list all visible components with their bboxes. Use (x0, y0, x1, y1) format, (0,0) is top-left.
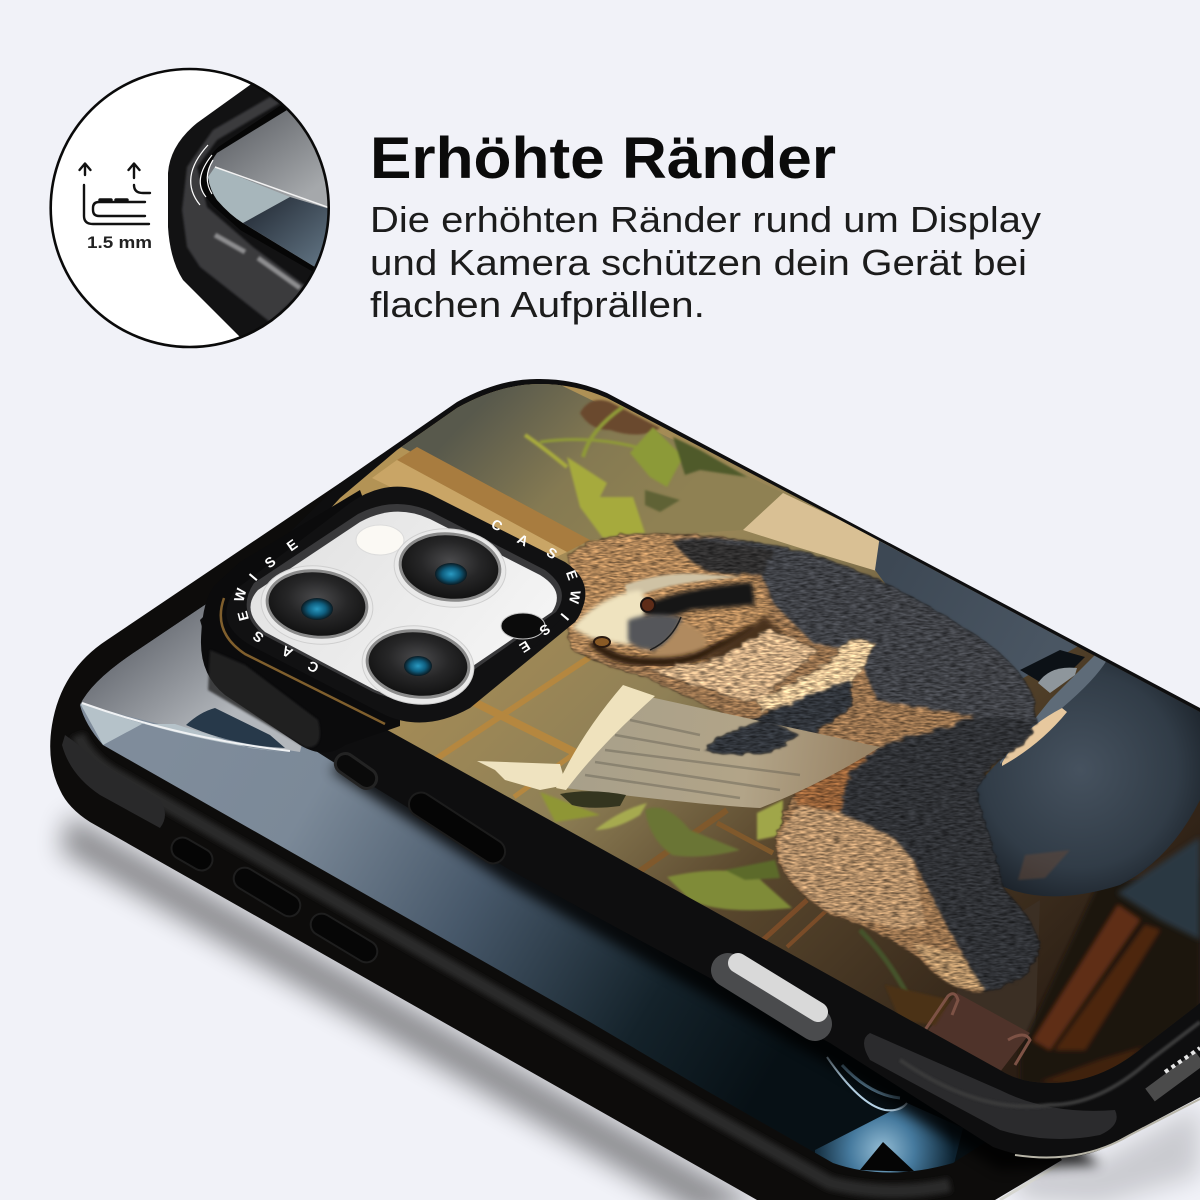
back frame carbon pad (62, 735, 165, 828)
casewise lettering left: S (261, 553, 279, 571)
flower pot (927, 993, 1030, 1072)
sloth lower hand (560, 791, 626, 808)
book spine edge (556, 685, 655, 790)
screen lower blue glow (815, 1103, 963, 1175)
corner inner rim (204, 106, 318, 270)
back frame highlight (78, 735, 950, 1191)
sloth chest and arm (647, 628, 877, 757)
tissue (1038, 668, 1077, 693)
power button (167, 833, 217, 875)
casewise lettering left: I (246, 570, 260, 584)
sloth hand on book (702, 720, 800, 755)
plant soil (885, 985, 950, 1025)
lidar sensor (501, 613, 545, 639)
lens top right (390, 523, 510, 613)
book page (565, 697, 880, 808)
right frame grille (1150, 1058, 1200, 1095)
wall light patch (743, 493, 900, 572)
sloth muzzle (628, 614, 682, 650)
sloth lower eye (594, 637, 610, 647)
back phone (50, 483, 1062, 1200)
camera glass plate (250, 512, 557, 696)
corner frame gloss (215, 235, 300, 288)
label: 1.5 mm: 1.5 mm (87, 233, 152, 252)
toilet base (1117, 837, 1200, 940)
gold sliver around ring (221, 598, 385, 724)
front phone frame (200, 379, 1200, 1158)
window beam (397, 447, 590, 552)
casewise lettering right: E (517, 638, 533, 656)
upper plant (525, 407, 747, 538)
corner screen (208, 100, 340, 280)
casewise lettering right: S (544, 544, 560, 562)
casewise lettering right: A (515, 531, 531, 549)
lens bottom (358, 620, 478, 710)
charging port (728, 963, 818, 1024)
casewise lettering left: C (305, 658, 321, 676)
volume down button (307, 910, 381, 966)
lens left (257, 560, 377, 650)
book left pages (477, 761, 566, 790)
back phone shadow (60, 815, 760, 1200)
wooden floor (1020, 880, 1200, 1085)
window beam light (372, 460, 567, 562)
screen blue curves (827, 1057, 907, 1110)
screen white curve (82, 703, 290, 751)
detail circle: raised edge (51, 69, 340, 360)
toilet reflections (1018, 850, 1070, 880)
sloth brow (624, 572, 740, 595)
body text: und Kamera schützen dein Gerät bei (370, 242, 1027, 283)
front phone shadow on back phone (330, 730, 1100, 1170)
bump carbon pad (208, 650, 320, 747)
casewise lettering right (489, 516, 584, 656)
circle border (51, 69, 329, 347)
toilet tank (875, 535, 1080, 680)
grille teeth (1165, 1048, 1200, 1072)
corner frame grey band (182, 97, 307, 322)
volume up button (230, 864, 304, 920)
microphone slot (331, 750, 381, 792)
ring inner bevel (247, 504, 562, 699)
sloth neck shadow (700, 615, 795, 672)
long side button (404, 788, 510, 868)
front phone shadow on ground (1010, 1105, 1200, 1200)
screen blue curve two (842, 1065, 900, 1098)
artwork upper wall (397, 375, 900, 550)
screen black triangle (860, 1142, 915, 1172)
screen light band (80, 703, 290, 753)
corner screen blue panel (243, 197, 340, 280)
pot rim (925, 994, 1030, 1065)
back phone screen (80, 604, 965, 1172)
screen upper wallpaper (81, 604, 302, 752)
casewise lettering left: W (231, 586, 250, 603)
camera bump (201, 487, 585, 752)
sloth (567, 533, 1040, 993)
sloth cream face (572, 590, 650, 645)
casewise lettering left (231, 536, 321, 676)
casewise lettering right: W (566, 589, 584, 606)
casewise lettering right: S (537, 621, 553, 639)
ring top face over glass edge (530, 598, 583, 650)
front phone (200, 370, 1200, 1158)
toilet gap (1020, 650, 1085, 682)
camera ring (226, 487, 585, 723)
lower frame pad (864, 1033, 1117, 1139)
back phone silver edge (1000, 1164, 1060, 1200)
frame highlight (900, 1022, 1200, 1107)
lattice lower (637, 810, 827, 947)
bump body (201, 490, 400, 752)
front frame edge (1015, 1099, 1200, 1158)
circle fill (51, 69, 329, 347)
impact arcs (191, 145, 213, 205)
casewise lettering left: E (284, 536, 300, 554)
corner frame (168, 80, 340, 360)
body text: flachen Aufprällen. (370, 284, 705, 325)
sloth smile (650, 617, 681, 650)
flash (356, 525, 404, 555)
corner screen white line (215, 167, 330, 208)
corner screen light panel (208, 167, 290, 223)
sloth eye (641, 598, 655, 612)
casewise lettering left: A (279, 643, 295, 661)
toilet rim (1000, 655, 1107, 764)
lower plants (540, 792, 908, 990)
body text (370, 199, 1041, 325)
sloth fur mass (567, 533, 1040, 993)
casewise lettering right: I (558, 610, 572, 624)
casewise lettering left: S (250, 628, 266, 646)
screen dark blob (186, 708, 285, 748)
sloth eye stripe (645, 582, 755, 618)
book (477, 685, 880, 808)
back phone frame (50, 483, 1062, 1200)
wall behind legs (957, 900, 1040, 1040)
casewise lettering right: E (563, 568, 581, 582)
icon: raised edge diagram (80, 164, 150, 224)
upper plant pot (580, 400, 660, 435)
phone corner detail (168, 80, 340, 360)
toilet rim highlight (1002, 708, 1067, 766)
artwork (332, 384, 1200, 1083)
sloth cheek (640, 622, 706, 662)
sloth lower stripe (592, 628, 755, 662)
book text lines (585, 720, 800, 798)
heading: Erhöhte Ränder (370, 126, 836, 191)
casewise lettering right: C (489, 516, 505, 534)
window lattice (436, 657, 600, 797)
casewise lettering left: E (234, 609, 252, 623)
toilet bowl (972, 655, 1200, 896)
body text: Die erhöhten Ränder rund um Display (370, 199, 1041, 240)
